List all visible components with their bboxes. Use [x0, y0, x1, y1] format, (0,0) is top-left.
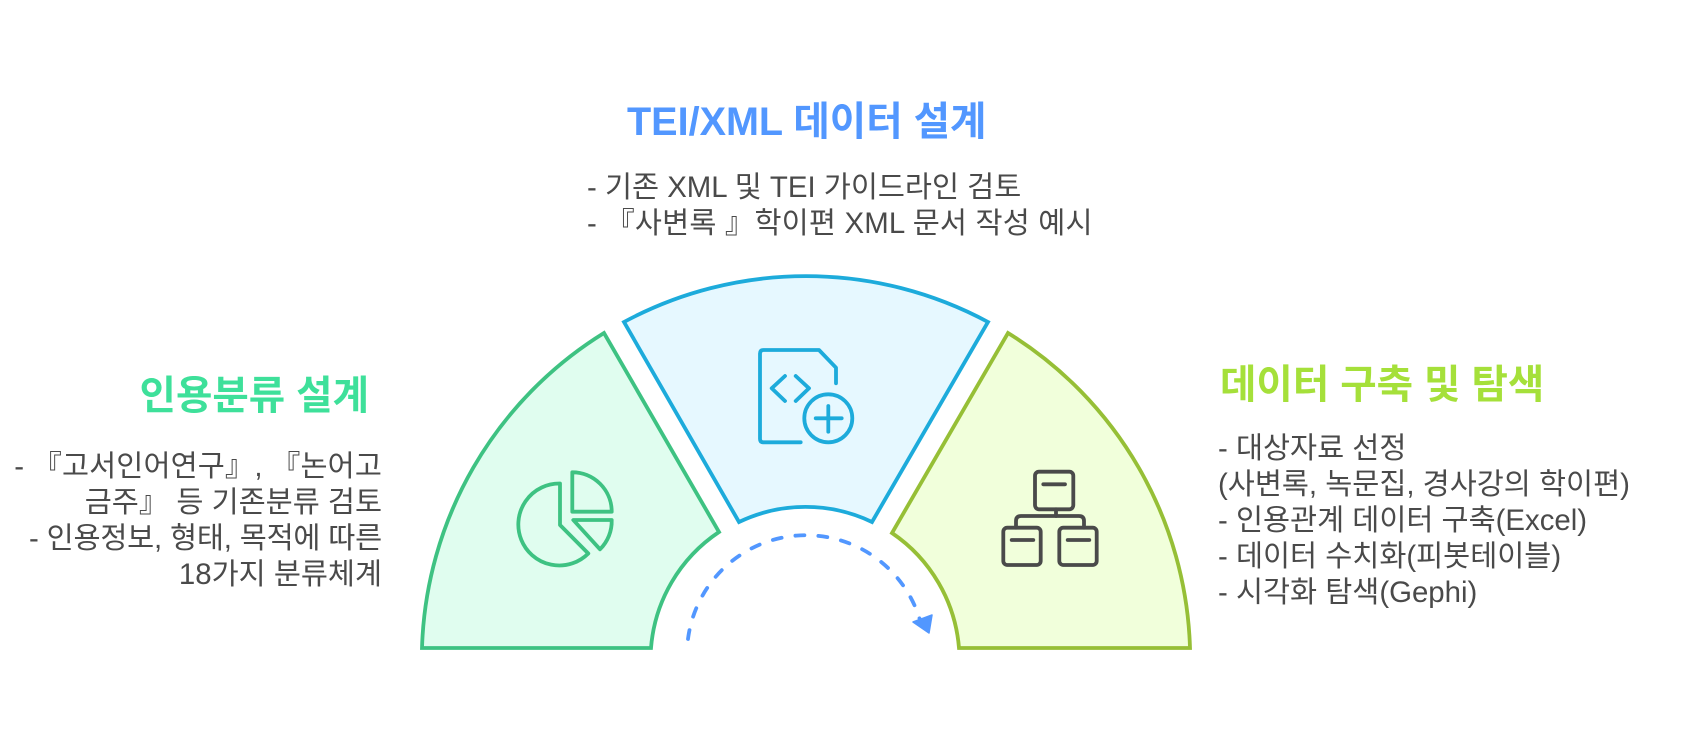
- panel: right segment: [892, 333, 1190, 648]
- panel: left segment: [422, 333, 719, 648]
- text block: right description: - 시각화 탐색(Gephi): [1218, 576, 1477, 609]
- panel: center segment: [624, 276, 988, 522]
- text block: center description: [587, 171, 1093, 240]
- heading: 데이터 구축 및 탐색: 데이터 구축 및 탐색: [1220, 363, 1544, 407]
- text block: right description: - 대상자료 선정: [1218, 432, 1406, 465]
- icon: pie chart: [518, 472, 612, 565]
- text block: right description: - 데이터 수치화(피봇테이블): [1218, 540, 1561, 573]
- arrow: dashed curved flow: [688, 535, 932, 639]
- text block: left description: - 인용정보, 형태, 목적에 따른: [29, 522, 382, 555]
- icon: hierarchy boxes: [1003, 472, 1097, 565]
- text block: left description: [14, 450, 382, 591]
- heading: TEI/XML 데이터 설계: TEI/XML 데이터 설계: [627, 100, 986, 144]
- text block: left description: 18가지 분류체계: [179, 558, 382, 591]
- text block: left description: 금주』 등 기존분류 검토: [85, 486, 382, 519]
- text block: right description: (사변록, 녹문집, 경사강의 학이편): [1218, 468, 1630, 501]
- icon: code document with plus: [760, 350, 852, 442]
- text block: right description: - 인용관계 데이터 구축(Excel): [1218, 504, 1587, 537]
- text block: center description: - 『사변록 』학이편 XML 문서 작성 예시: [587, 207, 1093, 240]
- text block: right description: [1218, 432, 1630, 609]
- text block: left description: - 『고서인어연구』, 『논어고: [14, 450, 382, 483]
- text block: center description: - 기존 XML 및 TEI 가이드라인 검토: [587, 171, 1021, 204]
- heading: 인용분류 설계: 인용분류 설계: [140, 374, 369, 418]
